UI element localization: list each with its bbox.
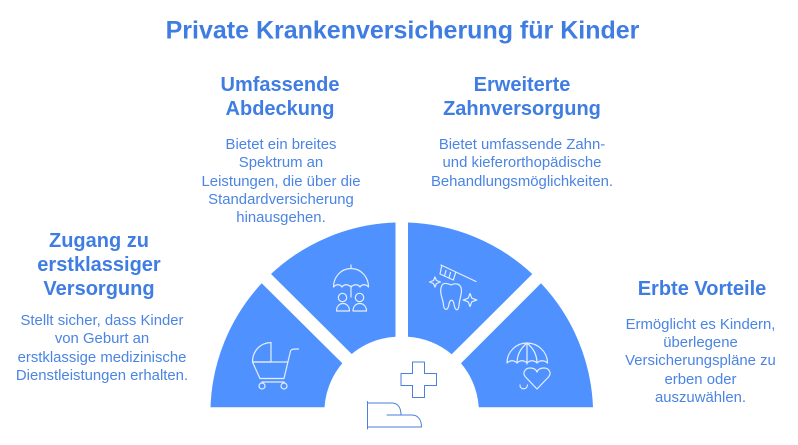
panel: Erweiterte Zahnversorgung (431, 74, 613, 190)
text block: Umfassende: Standardversicherung (208, 192, 354, 208)
sector: Zugang (210, 283, 342, 407)
heading: Zugang: Versorgung (43, 278, 155, 300)
text block: Erweiterte: Bietet umfassende Zahn- (439, 137, 605, 153)
text block: Erbte Vorteile: Versicherungspläne zu (625, 353, 776, 369)
text block: Zugang: Dienstleistungen erhalten. (16, 368, 188, 384)
icon: umbrella with heart (507, 343, 550, 389)
heading: Erweiterte: Zahnversorgung (443, 98, 601, 120)
text block: Zugang (16, 313, 188, 384)
text block: Zugang: Stellt sicher, dass Kinder (20, 313, 184, 329)
text block: Erweiterte (431, 137, 613, 190)
icon: baby stroller (252, 342, 298, 389)
text block: Erbte Vorteile: Ermöglicht es Kindern, (626, 317, 775, 333)
icon: tooth with brush (430, 265, 477, 310)
text block: Erweiterte: und kieferorthopädische (443, 155, 601, 171)
heading: Zugang: erstklassiger (37, 254, 161, 276)
title: Private Krankenversicherung für Kinder (166, 16, 640, 44)
text block: Umfassende: Spektrum an (239, 155, 323, 171)
heading: Erbte Vorteile: Erbte Vorteile (638, 278, 766, 300)
text block: Umfassende: hinausgehen. (236, 210, 326, 226)
text block: Erbte Vorteile: erben oder (664, 372, 737, 388)
panel: Erbte Vorteile (625, 278, 776, 406)
heading: Umfassende: Abdeckung (226, 98, 334, 120)
panel: Umfassende Abdeckung (202, 74, 360, 226)
heading: Umfassende: Umfassende (221, 74, 339, 96)
heading: Zugang (37, 230, 161, 300)
sector: Abdeckung (271, 222, 396, 354)
text block: Erweiterte: Behandlungsmöglichkeiten. (431, 174, 613, 190)
panel: Zugang zu erstklassiger Versorgung (16, 230, 188, 384)
sector: Vorteile (461, 283, 593, 407)
text block: Erbte Vorteile: überlegene (663, 335, 738, 351)
icon: umbrella over two people (334, 265, 368, 311)
icon: hand (368, 402, 422, 429)
text block: Umfassende (202, 137, 360, 226)
icon: medical cross (401, 362, 436, 398)
text block: Zugang: von Geburt an (55, 331, 149, 347)
text block: Zugang: erstklassige medizinische (18, 350, 186, 366)
heading: Erweiterte (443, 74, 601, 120)
sector: Zahnversorgung (408, 222, 532, 354)
heading: Umfassende (221, 74, 339, 120)
text block: Erbte Vorteile (625, 317, 776, 406)
heading: Erweiterte: Erweiterte (474, 74, 570, 96)
semicircle chart (210, 222, 593, 407)
heading: Zugang: Zugang zu (49, 230, 149, 252)
text block: Erbte Vorteile: auszuwählen. (655, 390, 746, 406)
text block: Umfassende: Bietet ein breites (226, 137, 336, 153)
text block: Umfassende: Leistungen, die über die (202, 174, 360, 190)
